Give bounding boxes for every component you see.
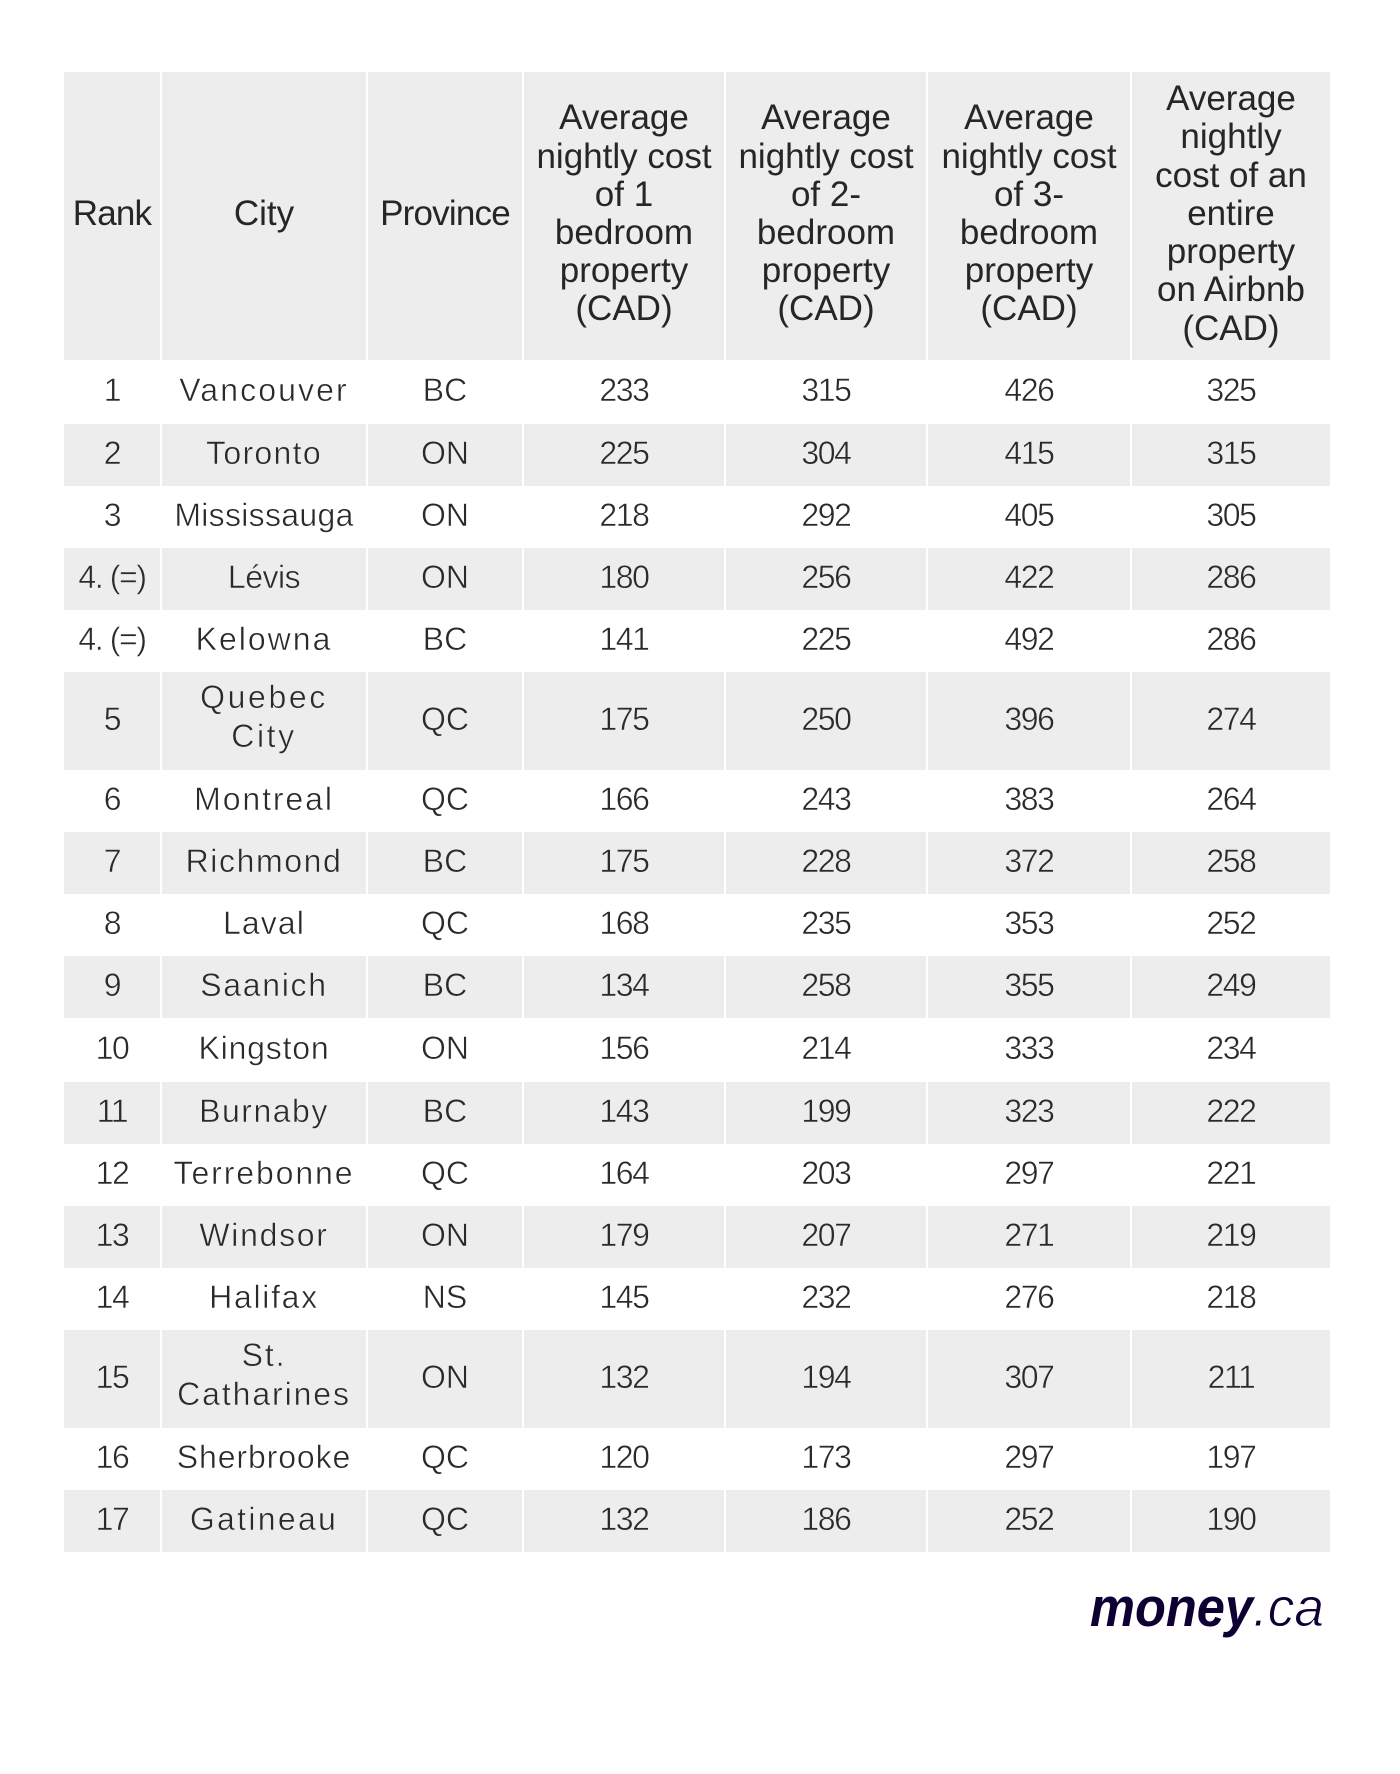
row: rank 8 Laval: 235 (801, 905, 851, 941)
row: rank 9 Saanich: 134 (599, 967, 649, 1003)
row: rank 10 Kingston: Kingston (199, 1030, 329, 1066)
row: rank 4 tie Kelowna: 492 (1004, 621, 1054, 657)
row: rank 7 Richmond: Richmond (186, 843, 342, 879)
row: rank 2 Toronto: 415 (1004, 435, 1054, 471)
row: rank 6 Montreal: Montreal (194, 781, 334, 817)
row: rank 12 Terrebonne: 221 (1206, 1155, 1256, 1191)
row: rank 7 Richmond (64, 832, 1330, 894)
row: rank 16 Sherbrooke: 120 (599, 1439, 649, 1475)
row: rank 1 Vancouver: 1 (104, 372, 120, 408)
table header row (64, 72, 1330, 360)
row: rank 13 Windsor: 207 (801, 1217, 851, 1253)
row: rank 7 Richmond: 228 (801, 843, 851, 879)
row: rank 11 Burnaby (64, 1082, 1330, 1144)
column heading: 2 bedroom cost: bedroom (757, 213, 895, 252)
column heading: 1 bedroom cost: bedroom (555, 213, 693, 252)
column heading: 1 bedroom cost (524, 72, 724, 360)
row: rank 8 Laval: 252 (1206, 905, 1256, 941)
column heading: entire property cost: Average (1166, 79, 1296, 118)
row: rank 4 tie Kelowna: Kelowna (196, 621, 332, 657)
column heading: rank: Rank (73, 194, 151, 233)
row: rank 10 Kingston: 234 (1206, 1030, 1256, 1066)
row: rank 13 Windsor: Windsor (199, 1217, 329, 1253)
row: rank 1 Vancouver: 233 (599, 372, 649, 408)
row: rank 6 Montreal: 383 (1004, 781, 1054, 817)
row: rank 2 Toronto: ON (421, 435, 469, 471)
row: rank 12 Terrebonne (96, 1155, 1256, 1191)
row: rank 4 tie Lévis: 286 (1206, 559, 1256, 595)
row: rank 4 tie Lévis: 180 (599, 559, 649, 595)
row: rank 14 Halifax: 14 (96, 1279, 128, 1315)
row: rank 10 Kingston: 10 (96, 1030, 128, 1066)
row: rank 5 Quebec City (64, 672, 1330, 770)
column heading: 2 bedroom cost: nightly cost (738, 137, 914, 176)
row: rank 4 tie Lévis: 422 (1004, 559, 1054, 595)
row: rank 9 Saanich: 355 (1004, 967, 1054, 1003)
row: rank 1 Vancouver: BC (423, 372, 467, 408)
column heading: entire property cost: (CAD) (1182, 308, 1280, 348)
row: rank 1 Vancouver: Vancouver (179, 372, 349, 408)
row: rank 2 Toronto: Toronto (206, 435, 322, 471)
row: rank 4 tie Lévis (64, 548, 1330, 610)
row: rank 16 Sherbrooke: 197 (1206, 1439, 1256, 1475)
row: rank 4 tie Lévis: ON (421, 559, 469, 595)
row: rank 17 Gatineau: 190 (1206, 1501, 1256, 1537)
column heading: 3 bedroom cost: property (965, 251, 1093, 290)
row: rank 14 Halifax: 276 (1004, 1279, 1054, 1315)
column heading: entire property cost: nightly (1180, 117, 1282, 156)
row: rank 9 Saanich: 9 (104, 967, 120, 1003)
row: rank 14 Halifax: Halifax (209, 1279, 319, 1315)
column heading: 1 bedroom cost: property (560, 251, 688, 290)
row: rank 16 Sherbrooke (96, 1439, 1256, 1475)
row: rank 12 Terrebonne: 203 (801, 1155, 851, 1191)
row: rank 3 Mississauga: 405 (1004, 497, 1054, 533)
row: rank 15 St. Catharines: ON (421, 1359, 469, 1395)
column heading: entire property cost: cost of an (1155, 156, 1307, 195)
row: rank 17 Gatineau: 252 (1004, 1501, 1054, 1537)
row: rank 2 Toronto (64, 424, 1330, 486)
row: rank 9 Saanich: 249 (1206, 967, 1256, 1003)
row: rank 14 Halifax: NS (423, 1279, 467, 1315)
column heading: 3 bedroom cost: (CAD) (980, 289, 1078, 328)
row: rank 2 Toronto: 304 (801, 435, 851, 471)
row: rank 6 Montreal: 166 (599, 781, 649, 817)
column heading: province (368, 72, 522, 360)
column heading: 2 bedroom cost: property (762, 251, 890, 290)
row: rank 15 St. Catharines: 307 (1004, 1359, 1054, 1395)
row: rank 11 Burnaby: 143 (599, 1093, 649, 1129)
row: rank 13 Windsor: 13 (96, 1217, 128, 1253)
row: rank 3 Mississauga: 218 (599, 497, 649, 533)
row: rank 8 Laval: 168 (599, 905, 649, 941)
row: rank 9 Saanich: Saanich (200, 967, 328, 1003)
row: rank 10 Kingston: ON (421, 1030, 469, 1066)
row: rank 1 Vancouver: 426 (1004, 372, 1054, 408)
row: rank 5 Quebec City: Quebec (200, 678, 328, 714)
row: rank 9 Saanich: BC (423, 967, 467, 1003)
row: rank 7 Richmond: BC (423, 843, 467, 879)
row: rank 14 Halifax: 232 (801, 1279, 851, 1315)
row: rank 4 tie Lévis: 256 (801, 559, 851, 595)
column heading: entire property cost: on Airbnb (1157, 270, 1305, 309)
row: rank 15 St. Catharines: 211 (1208, 1359, 1254, 1395)
row: rank 5 Quebec City: 396 (1004, 701, 1054, 737)
row: rank 3 Mississauga: 3 (104, 497, 120, 533)
row: rank 3 Mississauga (104, 497, 1256, 533)
row: rank 4 tie Kelowna: 141 (599, 621, 649, 657)
row: rank 8 Laval: QC (421, 905, 469, 941)
column heading: entire property cost: entire (1187, 194, 1275, 233)
row: rank 8 Laval: 353 (1004, 905, 1054, 941)
row: rank 2 Toronto: 315 (1206, 435, 1256, 471)
column heading: 3 bedroom cost: nightly cost (941, 137, 1117, 176)
row: rank 10 Kingston: 156 (599, 1030, 649, 1066)
row: rank 7 Richmond: 258 (1206, 843, 1256, 879)
row: rank 11 Burnaby: 222 (1206, 1093, 1256, 1129)
row: rank 15 St. Catharines: Catharines (177, 1376, 351, 1412)
row: rank 2 Toronto: 2 (104, 435, 120, 471)
row: rank 16 Sherbrooke: 173 (801, 1439, 851, 1475)
column heading: rank (64, 72, 160, 360)
row: rank 16 Sherbrooke: 16 (96, 1439, 128, 1475)
row: rank 8 Laval (104, 905, 1256, 941)
row: rank 5 Quebec City: 250 (801, 701, 851, 737)
row: rank 13 Windsor: ON (421, 1217, 469, 1253)
row: rank 12 Terrebonne: 12 (96, 1155, 128, 1191)
row: rank 13 Windsor: 271 (1004, 1217, 1054, 1253)
row: rank 12 Terrebonne: 297 (1004, 1155, 1054, 1191)
table: average nightly cost by city (64, 72, 1330, 1552)
row: rank 5 Quebec City: 175 (599, 701, 649, 737)
column heading: 2 bedroom cost (726, 72, 926, 360)
row: rank 17 Gatineau: 132 (599, 1501, 649, 1537)
row: rank 5 Quebec City: 5 (104, 701, 120, 737)
row: rank 11 Burnaby: BC (423, 1093, 467, 1129)
column heading: 2 bedroom cost: (CAD) (777, 289, 875, 328)
row: rank 9 Saanich (64, 956, 1330, 1018)
row: rank 15 St. Catharines: 15 (96, 1359, 128, 1395)
row: rank 4 tie Kelowna: 4. (=) (78, 621, 146, 657)
row: rank 14 Halifax: 145 (599, 1279, 649, 1315)
row: rank 4 tie Lévis: 4. (=) (78, 559, 146, 595)
row: rank 11 Burnaby: 199 (801, 1093, 851, 1129)
column heading: 1 bedroom cost: (CAD) (575, 289, 673, 328)
row: rank 10 Kingston: 333 (1004, 1030, 1054, 1066)
row: rank 15 St. Catharines: St. (242, 1336, 286, 1372)
row: rank 14 Halifax: 218 (1206, 1279, 1256, 1315)
column heading: 3 bedroom cost (928, 72, 1130, 360)
row: rank 4 tie Kelowna: 225 (801, 621, 851, 657)
row: rank 13 Windsor (64, 1206, 1330, 1268)
row: rank 15 St. Catharines: 194 (801, 1359, 851, 1395)
row: rank 1 Vancouver: 325 (1206, 372, 1256, 408)
row: rank 11 Burnaby: 11 (97, 1093, 127, 1129)
row: rank 1 Vancouver (104, 372, 1256, 408)
row: rank 6 Montreal: QC (421, 781, 469, 817)
row: rank 2 Toronto: 225 (599, 435, 649, 471)
row: rank 3 Mississauga: 292 (801, 497, 851, 533)
row: rank 15 St. Catharines (64, 1330, 1330, 1428)
row: rank 8 Laval: Laval (223, 905, 305, 941)
row: rank 4 tie Kelowna: BC (423, 621, 467, 657)
row: rank 10 Kingston: 214 (801, 1030, 851, 1066)
row: rank 1 Vancouver: 315 (801, 372, 851, 408)
row: rank 4 tie Kelowna: 286 (1206, 621, 1256, 657)
row: rank 3 Mississauga: Mississauga (174, 497, 354, 533)
row: rank 6 Montreal: 6 (104, 781, 120, 817)
row: rank 7 Richmond: 7 (104, 843, 120, 879)
column heading: 3 bedroom cost: bedroom (960, 213, 1098, 252)
row: rank 16 Sherbrooke: Sherbrooke (177, 1439, 351, 1475)
row: rank 4 tie Lévis: Lévis (228, 559, 300, 595)
row: rank 17 Gatineau: QC (421, 1501, 469, 1537)
row: rank 5 Quebec City: QC (421, 701, 469, 737)
column heading: province: Province (380, 194, 510, 233)
row: rank 15 St. Catharines: 132 (599, 1359, 649, 1395)
row: rank 17 Gatineau (64, 1490, 1330, 1552)
row: rank 7 Richmond: 175 (599, 843, 649, 879)
row: rank 11 Burnaby: Burnaby (199, 1093, 329, 1129)
column heading: 3 bedroom cost: Average (964, 98, 1094, 137)
column heading: 1 bedroom cost: Average (559, 98, 689, 137)
column heading: 1 bedroom cost: of 1 (595, 175, 653, 214)
row: rank 9 Saanich: 258 (801, 967, 851, 1003)
row: rank 5 Quebec City: 274 (1206, 701, 1256, 737)
row: rank 11 Burnaby: 323 (1004, 1093, 1054, 1129)
row: rank 8 Laval: 8 (104, 905, 120, 941)
column heading: city (162, 72, 366, 360)
column heading: 3 bedroom cost: of 3- (994, 175, 1064, 214)
column heading: entire property cost: property (1167, 232, 1295, 271)
row: rank 7 Richmond: 372 (1004, 843, 1054, 879)
row: rank 12 Terrebonne: 164 (599, 1155, 649, 1191)
row: rank 14 Halifax (96, 1279, 1256, 1315)
row: rank 6 Montreal: 243 (801, 781, 851, 817)
row: rank 13 Windsor: 219 (1206, 1217, 1256, 1253)
row: rank 3 Mississauga: 305 (1206, 497, 1256, 533)
row: rank 3 Mississauga: ON (421, 497, 469, 533)
row: rank 6 Montreal (104, 781, 1256, 817)
row: rank 12 Terrebonne: Terrebonne (174, 1155, 354, 1191)
column heading: 2 bedroom cost: of 2- (791, 175, 861, 214)
row: rank 16 Sherbrooke: 297 (1004, 1439, 1054, 1475)
column heading: entire property cost (1132, 72, 1330, 360)
column heading: 2 bedroom cost: Average (761, 98, 891, 137)
row: rank 6 Montreal: 264 (1206, 781, 1256, 817)
row: rank 17 Gatineau: 186 (801, 1501, 851, 1537)
column heading: 1 bedroom cost: nightly cost (536, 137, 712, 176)
row: rank 13 Windsor: 179 (599, 1217, 649, 1253)
row: rank 10 Kingston (96, 1030, 1256, 1066)
row: rank 5 Quebec City: City (231, 718, 297, 754)
row: rank 17 Gatineau: 17 (96, 1501, 128, 1537)
row: rank 17 Gatineau: Gatineau (190, 1501, 338, 1537)
row: rank 16 Sherbrooke: QC (421, 1439, 469, 1475)
row: rank 4 tie Kelowna (78, 621, 1256, 657)
row: rank 12 Terrebonne: QC (421, 1155, 469, 1191)
column heading: city: City (234, 194, 294, 233)
